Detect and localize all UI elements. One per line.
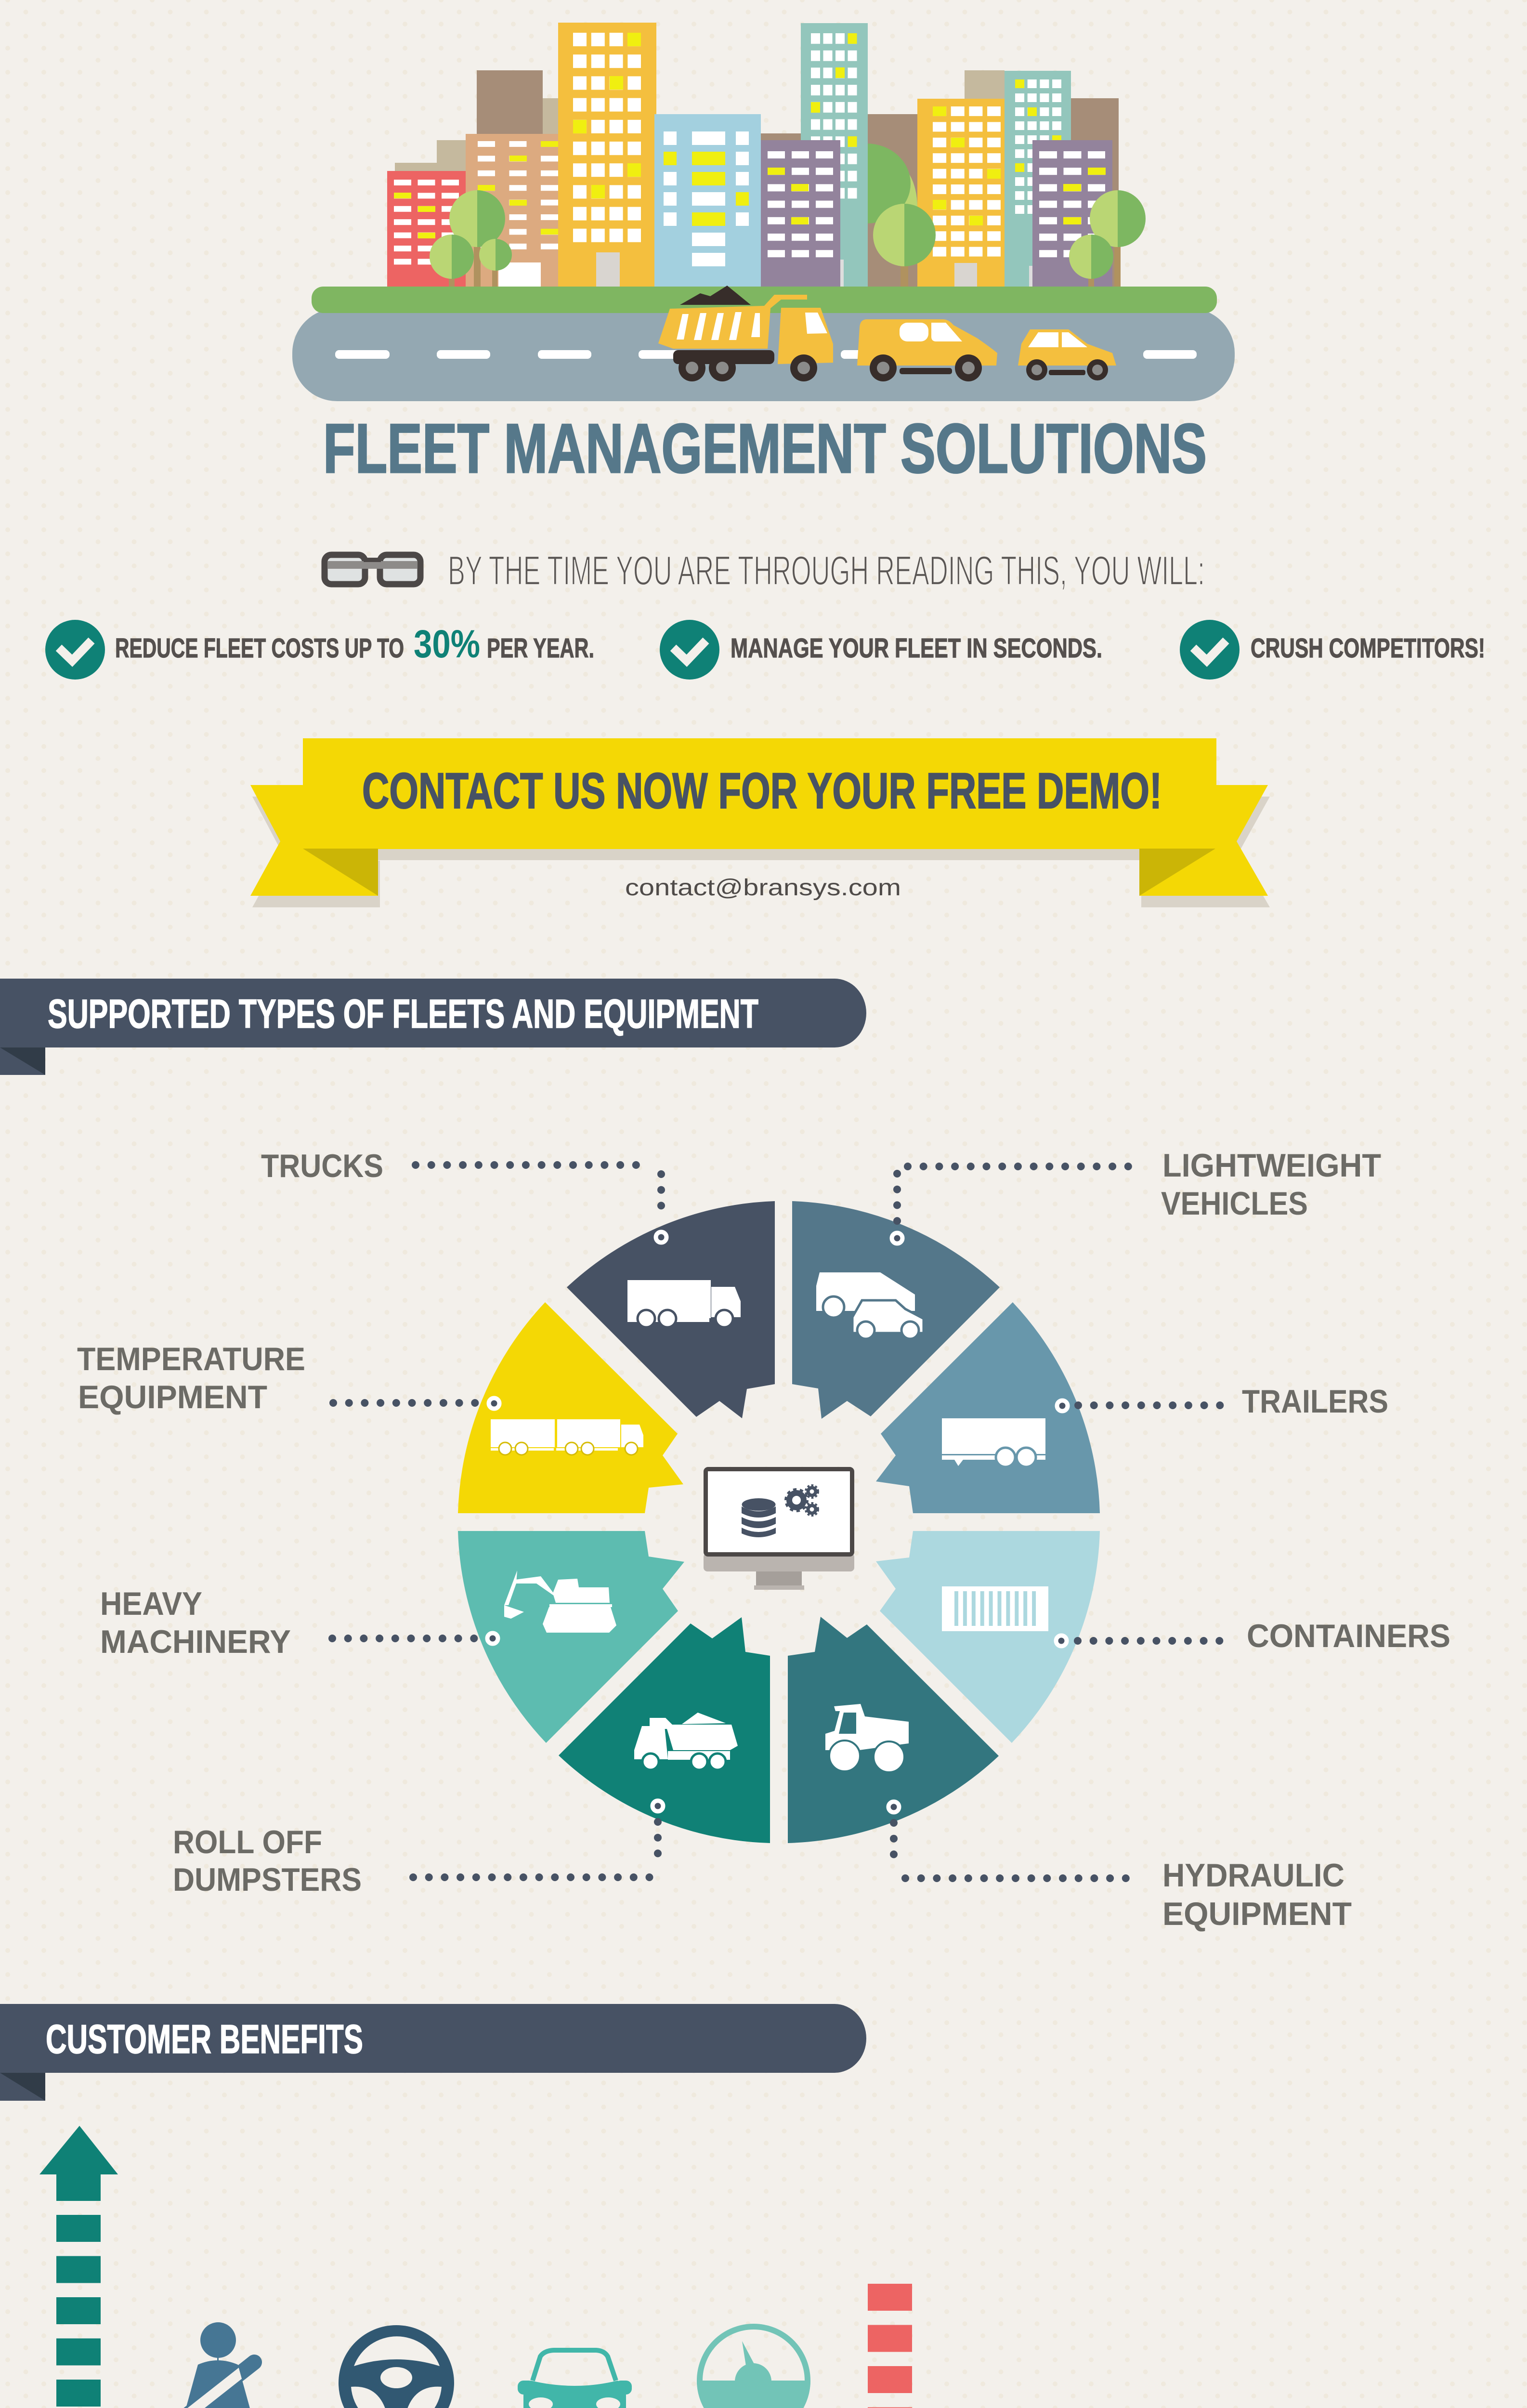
callout: hydraulic equipment [888,1802,1352,1932]
segment: roll off dumpsters [559,1617,770,1843]
trees [430,190,1146,287]
icon: check [45,620,105,680]
callout: heavy machinery [100,1585,498,1660]
callout: roll off dumpsters: ROLL OFF [173,1824,322,1860]
contact email: contact@bransys.com [625,875,901,901]
wheel diagram [458,1201,1100,1843]
callout: roll off dumpsters [173,1801,663,1898]
segment: containers [876,1531,1100,1743]
icon: car [1018,329,1116,380]
segment: temperature equipment [458,1302,683,1513]
section heading: fleets: SUPPORTED TYPES OF FLEETS AND EQUIPMENT [48,991,758,1036]
callout: lightweight vehicles: VEHICLES [1161,1185,1308,1222]
building: orange right [917,99,1005,287]
benefit: reduce costs: PER YEAR. [487,633,594,664]
benefit card: vehicle life [492,2350,658,2408]
benefit: manage fleet [660,620,1102,680]
callout: temperature equipment [77,1341,499,1415]
icon: steering wheel [339,2325,454,2408]
building: teal right [1005,71,1071,287]
icon: check [660,620,719,680]
road and grass strip [292,287,1235,401]
segment: hydraulic equipment [788,1617,999,1843]
callout: roll off dumpsters: DUMPSTERS [173,1861,362,1898]
back brown building and trees [867,114,917,287]
callout: temperature equipment: TEMPERATURE [77,1341,305,1377]
icon: van [857,319,997,381]
callout: hydraulic equipment: HYDRAULIC [1162,1857,1344,1894]
callout: containers [1056,1618,1450,1654]
benefit card: vehicle usage [670,2327,836,2408]
banner: contact us [250,738,1270,907]
icon: check [1180,620,1240,680]
icon: glasses [325,555,420,584]
icon: seat belt [184,2322,262,2408]
arrow: decrease [851,2284,929,2408]
benefit: reduce costs [45,620,594,680]
title: FLEET MANAGEMENT SOLUTIONS [323,409,1207,487]
segment: trucks [567,1201,775,1418]
callout: temperature equipment: EQUIPMENT [78,1379,267,1415]
callout: heavy machinery: MACHINERY [100,1623,291,1660]
callout: trailers: TRAILERS [1242,1383,1388,1420]
callout: trucks: TRUCKS [261,1148,383,1184]
building: blue [654,114,761,287]
benefit: reduce costs: REDUCE FLEET COSTS UP TO [115,633,404,664]
callout: trailers [1057,1383,1388,1420]
banner: contact us: CONTACT US NOW FOR YOUR FREE DEMO! [362,763,1162,819]
benefit: manage fleet: MANAGE YOUR FLEET IN SECONDS. [731,633,1102,664]
icon: dump truck [658,286,833,381]
icon: gears [786,1485,818,1516]
segment: heavy machinery [458,1531,684,1743]
building: red [387,171,467,287]
city skyline illustration [387,23,1146,287]
benefit: reduce costs: 30% [414,622,480,666]
benefit: crush competitors [1180,620,1485,680]
callout: hydraulic equipment: EQUIPMENT [1162,1896,1352,1932]
callout: lightweight vehicles: LIGHTWEIGHT [1162,1147,1381,1184]
callout: trucks [261,1148,666,1243]
segment: lightweight vehicles [792,1201,1000,1419]
callout: lightweight vehicles [892,1147,1381,1243]
icon: database [742,1498,776,1537]
icon: monitor [704,1469,854,1590]
benefit card: driver behavior [313,2325,480,2408]
building: teal tall [801,23,868,287]
back buildings [395,70,1119,287]
icon: gauge [697,2327,810,2408]
building: purple right [1032,140,1112,287]
callout: heavy machinery: HEAVY [100,1585,202,1622]
section heading: benefits [0,2004,866,2101]
callout: containers: CONTAINERS [1247,1618,1450,1654]
building: tall orange [558,23,656,287]
arrow: increase [39,2126,118,2408]
icon: car front [518,2350,632,2408]
building: purple [761,140,844,287]
section heading: fleets [0,979,866,1075]
segment: trailers [876,1302,1100,1513]
building: peach [466,134,558,287]
benefit card: driver safety [184,2322,262,2408]
section heading: benefits: CUSTOMER BENEFITS [46,2016,363,2062]
